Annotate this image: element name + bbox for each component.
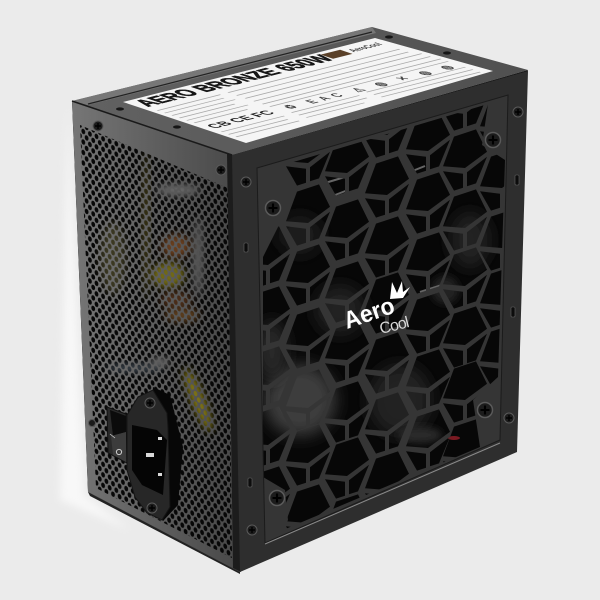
top screw holes [116,35,451,129]
screws [93,121,103,131]
grille screws [266,200,280,216]
certification marks row: ♻ EAC ⚠ ◍ ✕ ◍ ◍ [281,64,459,110]
spec table lines [157,47,485,137]
inlet screws [145,398,155,408]
frame slots [244,175,519,487]
interior components seen through holes [70,100,245,580]
rocker switch [107,407,127,463]
grille plate with honeycomb holes [257,95,508,543]
gold badge [321,50,352,59]
lip of front edge [232,70,528,158]
socket [132,425,167,495]
glow beside the case [60,105,130,530]
right edge shadow [227,153,241,572]
certification marks: CB CE FC [202,109,279,130]
panel: left side with perforation [70,100,245,580]
fan behind grille [263,105,505,528]
fan logo [340,281,411,338]
product photo: power supply unit [61,27,528,574]
inlet bracket [127,390,170,520]
grille frame outline [257,95,508,543]
panel: front face [232,71,528,572]
power inlet and switch [107,387,183,521]
back rim [72,27,376,105]
side top edge [72,101,232,155]
heading: AERO BRONZE 650W [129,53,340,109]
side plate [72,101,240,572]
brand: AeroCool [345,42,385,53]
fan logo: Aero [340,292,398,335]
label content [128,38,485,137]
bottom edge of case [88,492,240,574]
frame screws [241,177,251,187]
bottom highlight [265,443,500,544]
pins [146,437,162,476]
panel: top face [72,27,528,158]
fan logo: Cool [378,314,411,338]
inlet shadow [150,387,183,521]
label sticker [123,38,493,143]
